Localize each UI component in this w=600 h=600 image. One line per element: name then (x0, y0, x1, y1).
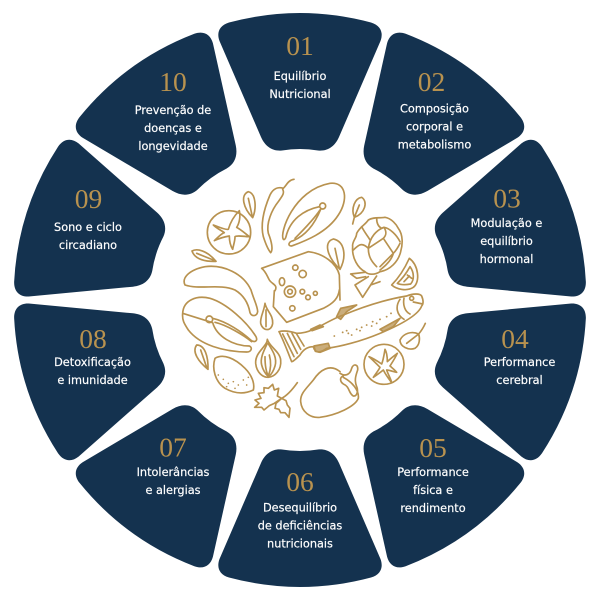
panel: 04 Performance cerebral: 04 (501, 323, 529, 354)
panel: 03 Modulação e equilíbrio hormonal (417, 134, 598, 332)
panel: 02 Composição corporal e metabolismo: corporal e (406, 120, 463, 134)
icon: chili pepper (262, 179, 294, 253)
icon: artichoke (351, 217, 402, 297)
panel: 01 Equilíbrio Nutricional: Nutricional (269, 88, 331, 101)
panel: 01 Equilíbrio Nutricional (218, 13, 382, 151)
panel: 06 Desequilíbrio de deficiências nutricionais: de deficiências (258, 520, 342, 532)
panel: 04 Performance cerebral: Performance (484, 356, 555, 369)
icon: banana (184, 266, 258, 316)
icon: leaf (328, 239, 344, 269)
icon: lower foods (183, 290, 425, 417)
icon: fish (279, 294, 423, 362)
lemon dots (217, 374, 249, 389)
icon: tomato slice (364, 344, 404, 384)
panel: 01 Equilíbrio Nutricional: Equilíbrio (274, 70, 326, 83)
panel: 10 Prevenção de doenças e longevidade: doenças e (144, 122, 202, 135)
panel: 03 Modulação e equilíbrio hormonal: hormonal (480, 253, 533, 266)
icon: small leaf (400, 323, 425, 349)
panel: 06 Desequilíbrio de deficiências nutricionais: 06 (286, 466, 314, 497)
panel: 07 Intolerâncias e alergias: e alergias (145, 484, 201, 497)
panel: 07 Intolerâncias e alergias (65, 373, 278, 580)
icon: leaf (261, 303, 273, 330)
panel: 03 Modulação e equilíbrio hormonal: Modulação e (471, 217, 542, 230)
panel: 04 Performance cerebral (417, 268, 598, 466)
panel: 05 Performance física e rendimento: 05 (419, 432, 447, 463)
panel: 08 Detoxificação e imunidade: e imunidade (57, 374, 128, 387)
panel: 02 Composição corporal e metabolismo: Composição (400, 102, 469, 116)
panel: 10 Prevenção de doenças e longevidade (65, 20, 278, 227)
panel: 05 Performance física e rendimento (322, 373, 535, 580)
panel: 03 Modulação e equilíbrio hormonal: equilíbrio (480, 235, 533, 248)
icon: tomato (207, 211, 251, 254)
icon: salmon steak (283, 183, 345, 246)
panel: 07 Intolerâncias e alergias: 07 (159, 432, 187, 462)
icon: cheese (262, 252, 340, 300)
panel: 05 Performance física e rendimento: Performance (397, 466, 469, 479)
icon: onion (256, 339, 281, 377)
icon: salmon steak lower (183, 297, 257, 352)
illustration: food line drawings (183, 179, 425, 417)
icon: small leaf (192, 250, 216, 261)
icon: leaf (195, 345, 208, 369)
icon: leaf (353, 197, 365, 224)
panel: 09 Sono e ciclo circadiano: circadiano (59, 239, 117, 252)
panel: 02 Composição corporal e metabolismo: 02 (418, 66, 445, 97)
fish spots (333, 312, 392, 337)
panel: 06 Desequilíbrio de deficiências nutricionais (218, 449, 382, 587)
panel: 09 Sono e ciclo circadiano (2, 134, 183, 332)
panel: 07 Intolerâncias e alergias: Intolerâncias (137, 466, 210, 479)
panel: 03 Modulação e equilíbrio hormonal: 03 (493, 182, 521, 214)
panel: 02 Composição corporal e metabolismo (322, 20, 535, 227)
panel: 06 Desequilíbrio de deficiências nutricionais: Desequilíbrio (263, 502, 337, 514)
panel: 04 Performance cerebral: cerebral (496, 374, 543, 387)
panel: 08 Detoxificação e imunidade: Detoxificação (54, 356, 131, 369)
panel: 10 Prevenção de doenças e longevidade: Prevenção de (135, 104, 211, 117)
panel: 05 Performance física e rendimento: física e (413, 484, 453, 497)
panel: 02 Composição corporal e metabolismo: metabolismo (398, 138, 471, 152)
icon: cheese lower part (273, 290, 339, 322)
panel: 05 Performance física e rendimento: rendimento (400, 502, 466, 515)
panel: 06 Desequilíbrio de deficiências nutricionais: nutricionais (267, 538, 333, 550)
panel: 01 Equilíbrio Nutricional: 01 (286, 30, 314, 61)
panel: 09 Sono e ciclo circadiano: Sono e ciclo (54, 221, 122, 234)
icon: leaf (244, 192, 255, 218)
panel: 10 Prevenção de doenças e longevidade: 10 (159, 66, 187, 97)
icon: upper foods (184, 179, 418, 316)
icon: parsley (255, 383, 297, 417)
icon: lemon wedge (392, 258, 418, 290)
icon: bell pepper (301, 365, 358, 417)
panel: 08 Detoxificação e imunidade (2, 268, 183, 466)
panel: 10 Prevenção de doenças e longevidade: longevidade (138, 140, 208, 153)
icon: lemon (214, 356, 254, 393)
panel: 08 Detoxificação e imunidade: 08 (79, 323, 107, 354)
panel: 09 Sono e ciclo circadiano: 09 (75, 183, 102, 214)
